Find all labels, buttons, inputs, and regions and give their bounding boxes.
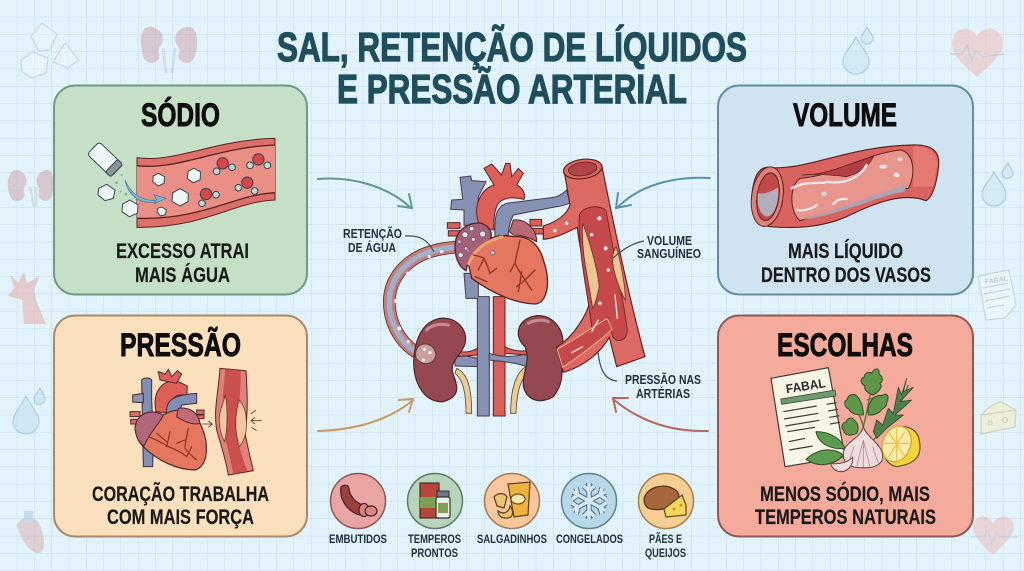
heading: escolhas: ESCOLHAS — [777, 327, 913, 363]
illustration: heart and narrowed artery — [130, 368, 262, 475]
label: volume sanguíneo: SANGUÍNEO — [637, 246, 701, 261]
icon: faded water drops top — [843, 27, 873, 74]
icon: faded vessel — [8, 272, 46, 324]
caption: pressão: CORAÇÃO TRABALHA — [92, 483, 269, 506]
illustration: food label, herbs, garlic, lemon: FABAL — [785, 376, 827, 396]
heading: volume: VOLUME — [793, 97, 897, 133]
icon: faded label document: FABAL — [984, 276, 1009, 286]
icon: faded salt crystals — [21, 23, 79, 78]
food labels: QUEIJOS — [645, 548, 686, 560]
caption: escolhas: TEMPEROS NATURAIS — [755, 506, 936, 529]
icon: faded kidneys left — [8, 170, 54, 207]
food icon: temperos prontos — [408, 474, 462, 528]
panel: escolhas — [718, 316, 973, 536]
fluid bubble at kidney — [416, 344, 436, 364]
illustration: food label, herbs, garlic, lemon — [771, 368, 920, 472]
caption: escolhas — [755, 482, 936, 529]
food labels: SALGADINHOS — [477, 534, 547, 546]
illustration: blood vessel full of fluid — [748, 145, 939, 229]
label: volume sanguíneo — [637, 234, 701, 261]
caption: sódio: EXCESSO ATRAI — [116, 240, 249, 263]
food icon: congelados — [562, 474, 616, 528]
caption: escolhas: MENOS SÓDIO, MAIS — [760, 482, 930, 506]
heart — [455, 220, 547, 304]
food icon: embutidos — [330, 474, 386, 528]
icon: faded kidneys top — [141, 27, 197, 73]
icon: faded label document — [978, 270, 1016, 320]
arrow: volume to center — [616, 178, 710, 208]
label: volume sanguíneo: VOLUME — [647, 234, 692, 248]
food labels: CONGELADOS — [556, 534, 623, 546]
artery with plaque — [543, 157, 645, 372]
food labels — [329, 533, 686, 560]
central illustration: heart, kidneys and arteries — [389, 157, 645, 416]
panel: pressão — [54, 316, 307, 536]
icon: faded heart with pulse top right — [950, 28, 1004, 77]
kidneys — [414, 316, 563, 402]
caption: sódio: MAIS ÁGUA — [135, 264, 230, 287]
caption: sódio — [116, 240, 249, 287]
leader line: volume sanguíneo — [613, 241, 644, 258]
icon: faded heart bottom left — [17, 511, 44, 553]
label: pressão nas artérias: ARTÉRIAS — [636, 386, 690, 401]
food labels: TEMPEROS — [408, 534, 461, 546]
panel: sódio — [54, 86, 307, 294]
caption: volume: DENTRO DOS VASOS — [761, 264, 931, 287]
arrow: pressão to center — [318, 399, 413, 431]
tube from heart to kidney — [389, 247, 455, 355]
caption: volume: MAIS LÍQUIDO — [788, 240, 903, 263]
lower vena cava and aorta — [455, 273, 528, 416]
icon: faded cheese — [981, 402, 1016, 434]
heading: pressão: PRESSÃO — [120, 327, 241, 363]
label: pressão nas artérias: PRESSÃO NAS — [625, 372, 701, 387]
food labels: PÃES E — [649, 533, 682, 546]
label: retenção de água: RETENÇÃO — [343, 226, 402, 241]
caption: pressão: COM MAIS FORÇA — [107, 506, 254, 529]
food labels: PRONTOS — [411, 548, 458, 560]
illustration: salt entering vessel — [87, 138, 275, 227]
title — [277, 24, 747, 112]
leader line: retenção de água — [405, 236, 434, 252]
panel: volume — [718, 86, 973, 294]
upper vessels of the heart — [447, 163, 570, 237]
caption: pressão — [92, 483, 269, 529]
label: retenção de água — [343, 226, 402, 255]
caption: volume — [761, 240, 931, 287]
label: retenção de água: DE ÁGUA — [348, 240, 396, 255]
title: E PRESSÃO ARTERIAL — [337, 66, 687, 112]
label: pressão nas artérias — [625, 372, 701, 401]
icon: faded water drops right — [982, 163, 1013, 206]
icon: faded heart with pulse bottom right — [971, 517, 1018, 555]
title: SAL, RETENÇÃO DE LÍQUIDOS — [277, 24, 747, 70]
heading: sódio: SÓDIO — [141, 97, 220, 133]
food icon: salgadinhos — [484, 474, 540, 528]
leader line: pressão nas artérias — [598, 352, 617, 381]
food icon: pães e queijos — [638, 474, 694, 528]
arrow: sódio to center — [318, 179, 412, 208]
arrow: escolhas to center — [613, 398, 708, 431]
food labels: EMBUTIDOS — [329, 534, 387, 546]
icon: faded water drops left — [13, 388, 45, 434]
